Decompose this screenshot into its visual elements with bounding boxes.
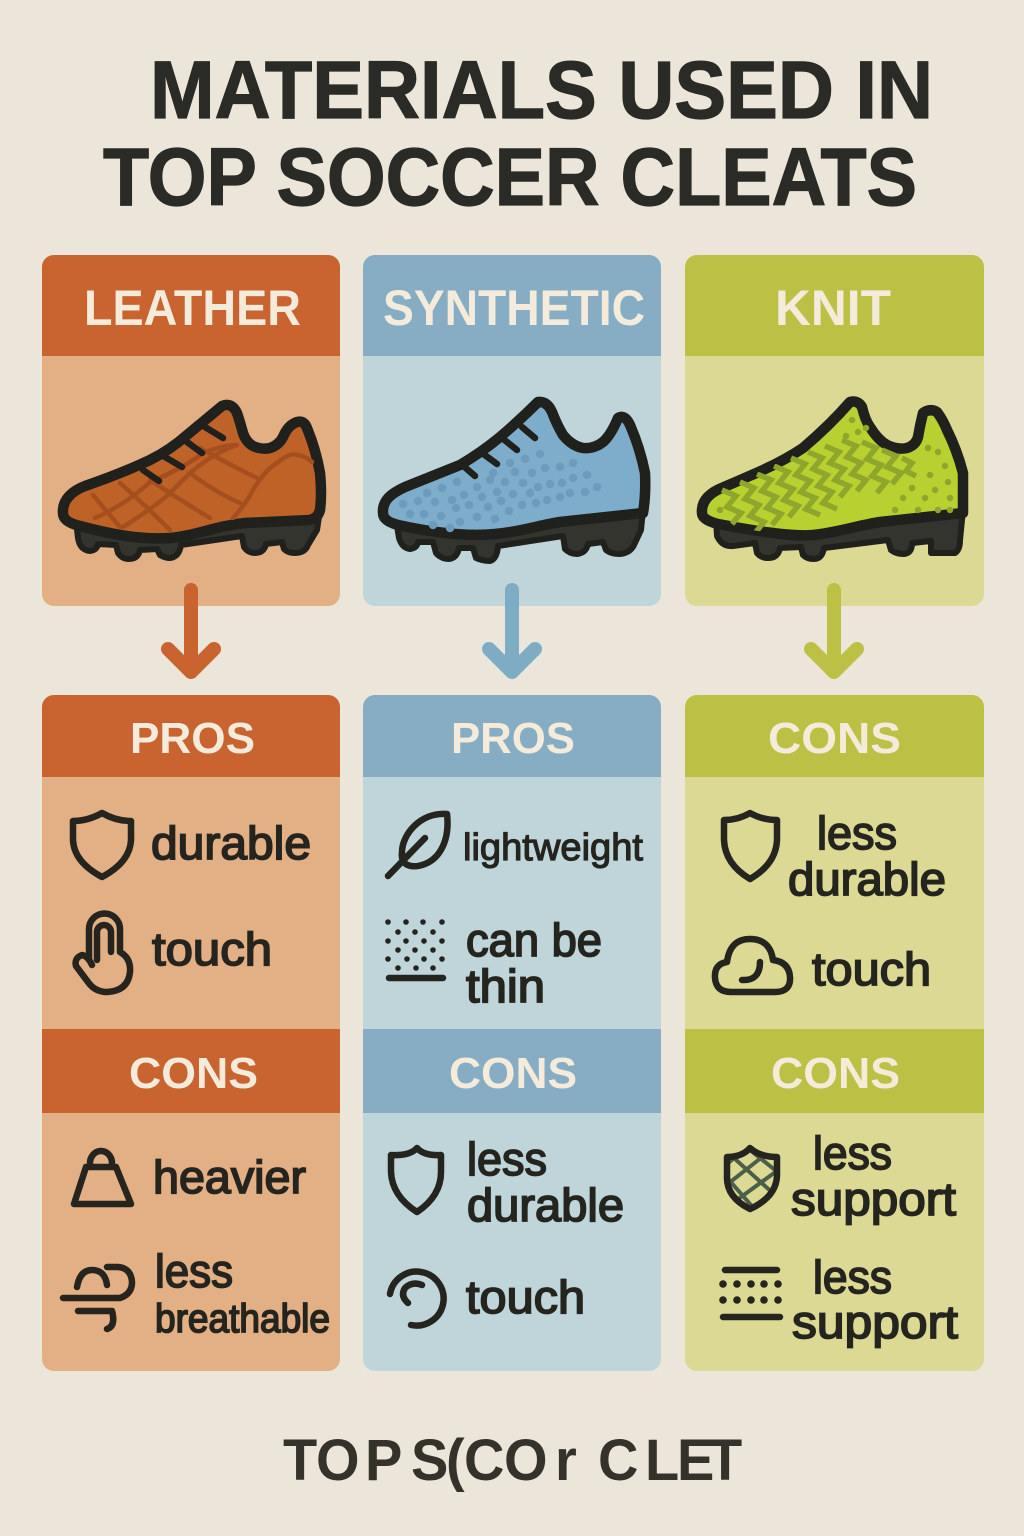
- knit zigzag texture: [720, 420, 950, 533]
- arrow: leather: [168, 590, 214, 672]
- item: less durable: [724, 807, 946, 905]
- item: less durable: durable: [788, 853, 946, 905]
- item: can be thin: thin: [466, 960, 545, 1012]
- item: touch: [76, 914, 272, 992]
- footer wordmark: TOP S(COr CLET: [283, 1428, 742, 1493]
- panel: leather pros and cons: [42, 695, 340, 1371]
- heading: knit: [685, 255, 984, 356]
- synthetic perforation dots: [403, 454, 597, 528]
- panel: leather material card: [42, 255, 340, 606]
- title: TOP SOCCER CLEATS: [103, 132, 917, 223]
- heading: pros: PROS: [451, 714, 575, 763]
- item: touch: touch: [466, 1271, 585, 1323]
- heading: cons: CONS: [768, 714, 901, 763]
- panel: synthetic material card: [363, 255, 661, 606]
- heading: cons: [363, 1029, 661, 1113]
- item: less support: support: [791, 1173, 956, 1225]
- icon: synthetic cleat: [383, 402, 645, 561]
- item: lightweight: [388, 814, 643, 876]
- heading: cons: CONS: [449, 1049, 577, 1098]
- item: less support: less: [813, 1127, 892, 1179]
- heading: pros: PROS: [130, 714, 255, 763]
- title: MATERIALS USED IN: [150, 45, 933, 136]
- item: less durable: less: [817, 807, 897, 859]
- heading: synthetic: SYNTHETIC: [383, 280, 645, 336]
- panel: knit material card: [685, 255, 984, 606]
- item: durable: durable: [151, 817, 311, 869]
- heading: pros: [363, 695, 661, 777]
- item: durable: [73, 813, 311, 877]
- item: touch: touch: [812, 943, 931, 995]
- item: touch: touch: [152, 923, 272, 975]
- heading: leather: [42, 255, 340, 356]
- item: less breathable: breathable: [155, 1297, 330, 1341]
- heading: leather: LEATHER: [84, 280, 301, 336]
- heading: cons: CONS: [771, 1049, 900, 1098]
- heading: pros: [42, 695, 340, 777]
- panel: knit cons: [685, 695, 984, 1371]
- item: can be thin: [385, 914, 602, 1012]
- arrow: knit: [811, 590, 857, 672]
- icon: knit cleat: [702, 402, 963, 559]
- heading: knit: KNIT: [775, 280, 891, 336]
- item: less durable: less: [467, 1133, 547, 1185]
- item: less breathable: less: [155, 1245, 233, 1297]
- item: less support: less: [813, 1251, 892, 1303]
- icon: leather cleat: [63, 405, 321, 559]
- item: touch: [715, 939, 931, 995]
- item: heavier: heavier: [153, 1151, 306, 1203]
- item: less breathable: [63, 1245, 330, 1341]
- item: less support: support: [792, 1296, 958, 1348]
- item: less durable: durable: [467, 1179, 624, 1231]
- item: lightweight: lightweight: [463, 827, 643, 869]
- laces: [143, 427, 223, 481]
- heading: cons: CONS: [129, 1049, 258, 1098]
- laces: [460, 427, 535, 476]
- heading: synthetic: [363, 255, 661, 356]
- item: can be thin: can be: [466, 914, 602, 966]
- item: less support: [720, 1127, 956, 1225]
- title: [103, 45, 933, 223]
- item: heavier: [74, 1151, 306, 1204]
- item: less durable: [391, 1133, 624, 1231]
- heading: cons: [685, 695, 984, 777]
- panel: synthetic pros and cons: [363, 695, 661, 1371]
- item: touch: [390, 1271, 585, 1326]
- heading: cons: [685, 1029, 984, 1113]
- item: less support: [719, 1251, 958, 1348]
- arrow: synthetic: [489, 590, 535, 672]
- leather stitching: [93, 445, 312, 530]
- heading: cons: [42, 1029, 340, 1113]
